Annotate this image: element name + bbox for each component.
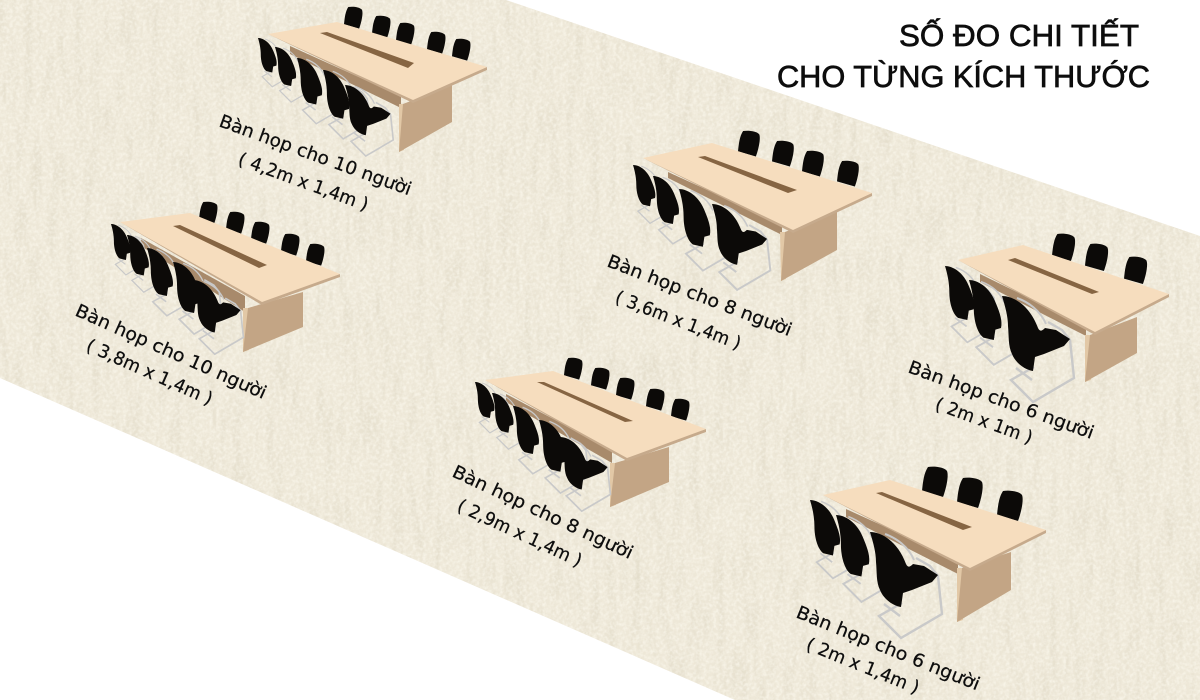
title [777, 17, 1150, 94]
table: 8 seats, 2.9m x 1.4m [475, 358, 706, 511]
label: 6 seats 2m x 1m: Bàn họp cho 6 người [905, 357, 1097, 444]
label: 8 seats 3.6m: Bàn họp cho 8 người [604, 251, 795, 341]
table: 10 seats, 3.8m x 1.4m [111, 202, 340, 354]
label: 10 seats 3.8m: ( 3,8m x 1,4m ) [83, 335, 216, 410]
label: 6 seats 2m x 1m: ( 2m x 1m ) [932, 394, 1035, 449]
label: 10 seats 4.2m: Bàn họp cho 10 người [216, 111, 414, 200]
label: 6 seats 2m x 1.4m: Bàn họp cho 6 người [793, 602, 983, 695]
title: CHO TỪNG KÍCH THƯỚC [777, 59, 1150, 94]
label: 8 seats 3.6m: ( 3,6m x 1,4m ) [612, 287, 744, 354]
title: SỐ ĐO CHI TIẾT [899, 17, 1139, 53]
label: 8 seats 2.9m: Bàn họp cho 8 người [449, 461, 636, 564]
table: 10 seats, 4.2m x 1.4m [258, 7, 487, 156]
label: 6 seats 2m x 1.4m: ( 2m x 1,4m ) [803, 634, 922, 699]
label: 10 seats 3.8m: Bàn họp cho 10 người [72, 300, 270, 404]
table: 6 seats, 2m x 1.4m [810, 467, 1046, 638]
label: 8 seats 2.9m: ( 2,9m x 1,4m ) [454, 495, 585, 572]
table: 8 seats, 3.6m x 1.4m [633, 131, 872, 290]
table: 6 seats, 2m x 1m [945, 234, 1169, 402]
label: 10 seats 4.2m: ( 4,2m x 1,4m ) [235, 149, 371, 216]
